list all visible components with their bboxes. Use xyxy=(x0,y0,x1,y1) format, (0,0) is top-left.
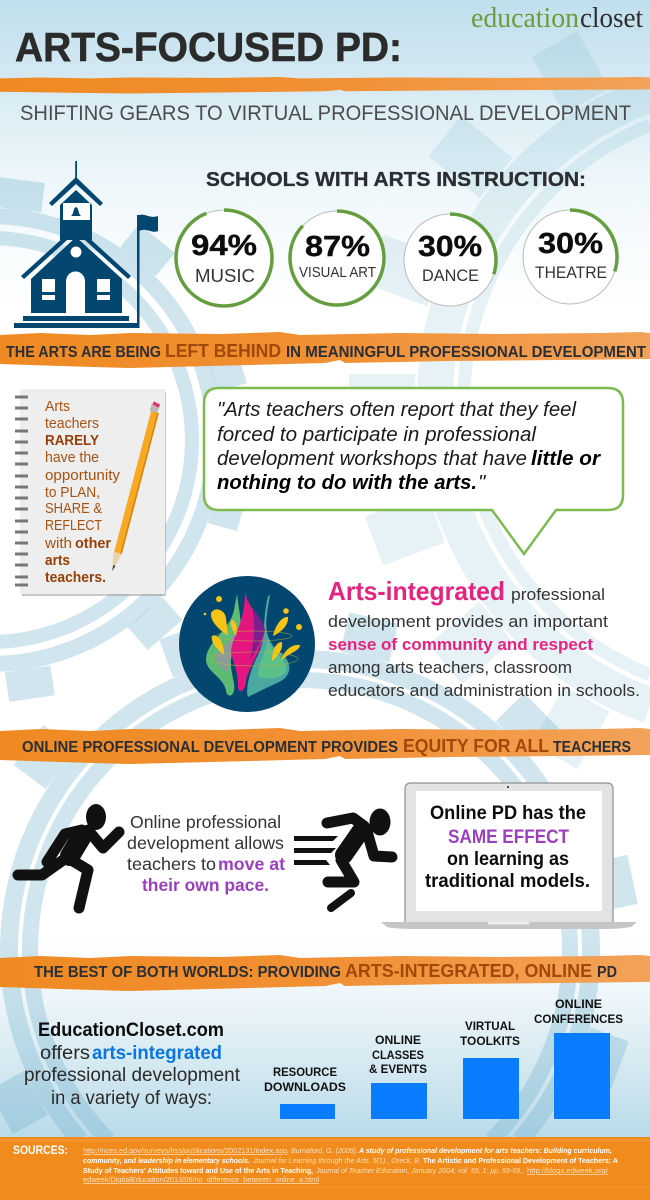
callout: quote bubble: " xyxy=(478,471,487,494)
bar: virtual toolkits: VIRTUAL xyxy=(465,1019,515,1033)
banner: equity for all: ONLINE PROFESSIONAL DEVELOPMENT PROVIDES xyxy=(22,739,398,756)
text block: educationcloset offer: EducationCloset.com xyxy=(38,1019,224,1041)
callout: quote bubble: "Arts teachers often report that they feel xyxy=(217,398,577,421)
logo: educationcloset: closet xyxy=(580,3,643,34)
source citations: http://nces.ed.gov/surveys/frss/publications/2002131/index.asp xyxy=(83,1146,287,1155)
donut: music 94%: MUSIC xyxy=(195,265,255,286)
text block: educationcloset offer: professional development xyxy=(24,1064,241,1086)
banner: left behind: THE ARTS ARE BEING xyxy=(6,344,161,361)
notebook text: RARELY xyxy=(45,433,99,449)
laptop screen text: traditional models. xyxy=(425,870,590,892)
text block: arts-integrated: professional xyxy=(511,585,605,604)
text block: arts-integrated: educators and administration in schools. xyxy=(328,681,640,700)
text block: move at own pace: their own pace. xyxy=(142,875,269,895)
text block: arts-integrated: Arts-integrated xyxy=(328,576,505,606)
callout: quote bubble: forced to participate in professional xyxy=(217,423,537,446)
banner: best of both worlds xyxy=(0,955,650,991)
banner: left behind: IN MEANINGFUL PROFESSIONAL DEVELOPMENT xyxy=(286,344,647,361)
laptop screen text: Online PD has the xyxy=(430,802,586,824)
text block: arts-integrated: sense of community and respect xyxy=(328,635,593,654)
notebook text: have the xyxy=(45,450,99,466)
notebook text xyxy=(44,399,121,586)
source citations: Journal for Learning through the Arts, 5(1)., Oreck, B. xyxy=(252,1156,421,1165)
notebook text: SHARE & xyxy=(45,501,102,517)
text block: educationcloset offer: in a variety of ways: xyxy=(51,1087,212,1109)
donut: theatre 30%: 30% xyxy=(538,228,603,260)
panel: sources xyxy=(0,1137,650,1200)
notebook text: with xyxy=(44,536,72,552)
banner: left behind xyxy=(0,332,650,368)
donut: dance 30%: DANCE xyxy=(422,266,479,285)
text block: educationcloset offer: arts-integrated xyxy=(92,1042,222,1064)
laptop screen text: on learning as xyxy=(447,848,569,870)
heading: schools with arts instruction: SCHOOLS WITH ARTS INSTRUCTION: xyxy=(206,169,586,191)
laptop xyxy=(381,783,637,929)
banner: equity for all: EQUITY FOR ALL xyxy=(403,735,549,756)
bar: online classes and events: CLASSES xyxy=(372,1048,424,1062)
donut: visual art 87%: VISUAL ART xyxy=(299,265,376,281)
source citations: The Artistic and Professional Development of Teachers: A xyxy=(423,1156,619,1165)
text block: arts-integrated: among arts teachers, classroom xyxy=(328,658,572,677)
icon: schoolhouse xyxy=(14,161,158,328)
banner: best of both worlds: ARTS-INTEGRATED, ONLINE xyxy=(345,960,592,981)
icon: sprinter with speed lines xyxy=(294,808,392,908)
bar: online classes and events: ONLINE xyxy=(375,1033,421,1047)
bar chart: ways of offering PD xyxy=(264,997,623,1119)
bar: resource downloads: DOWNLOADS xyxy=(264,1080,346,1094)
donut: dance 30% xyxy=(404,214,496,306)
bar: online conferences: CONFERENCES xyxy=(534,1012,623,1026)
banner: left behind: LEFT BEHIND xyxy=(165,340,281,361)
gear: lower centre xyxy=(1,618,633,1140)
notebook text: teachers. xyxy=(45,570,106,586)
bar: resource downloads: RESOURCE xyxy=(273,1065,337,1079)
text block: move at own pace: Online professional xyxy=(130,812,281,832)
donut: theatre 30% xyxy=(523,210,617,304)
notebook spiral binding xyxy=(15,397,28,585)
notebook text: to PLAN, xyxy=(45,485,100,501)
source citations: Journal of Teacher Education, January 2004; vol. 55, 1: pp. 55-69.; xyxy=(315,1166,524,1175)
bar: online classes and events xyxy=(369,1033,427,1119)
donut: music 94%: 94% xyxy=(191,230,257,262)
text block: educationcloset offer xyxy=(24,1019,241,1109)
banner: equity for all xyxy=(0,728,650,764)
notebook text: teachers xyxy=(45,416,99,432)
bar: online conferences: ONLINE xyxy=(555,997,602,1011)
banner: best of both worlds: PD xyxy=(597,964,617,981)
bar: resource downloads xyxy=(264,1065,346,1119)
banner: equity for all: TEACHERS xyxy=(553,739,631,756)
source citations: Study of Teachers' Attitudes toward and Use of the Arts in Teaching, xyxy=(83,1166,313,1175)
donut: visual art 87% xyxy=(290,211,384,305)
icon: pencil xyxy=(112,403,158,571)
text block: educationcloset offer: offers xyxy=(40,1042,90,1064)
gear: upper left xyxy=(0,180,243,699)
source citations: , Burnaford, G. (2009). xyxy=(287,1146,358,1155)
text block: move at own pace: development allows xyxy=(127,833,284,853)
bar: virtual toolkits xyxy=(460,1019,520,1119)
text block: move at own pace: teachers to xyxy=(127,854,216,874)
text block: arts-integrated: development provides an important xyxy=(328,612,608,631)
callout: quote bubble: development workshops that have xyxy=(217,447,527,470)
banner: best of both worlds: THE BEST OF BOTH WORLDS: PROVIDING xyxy=(34,964,341,981)
bar: virtual toolkits: TOOLKITS xyxy=(460,1034,520,1048)
source citations xyxy=(83,1146,619,1184)
text block: move at own pace: move at xyxy=(218,854,285,874)
notebook text: arts xyxy=(45,553,70,569)
panel: notebook xyxy=(15,389,166,596)
icon: abstract art circle xyxy=(179,576,315,712)
callout: quote bubble: nothing to do with the arts. xyxy=(217,471,477,494)
laptop screen text xyxy=(425,802,590,892)
sources label: SOURCES: xyxy=(13,1145,68,1157)
logo: educationcloset: education xyxy=(471,3,579,34)
bar: online conferences xyxy=(534,997,623,1119)
donut: theatre 30%: THEATRE xyxy=(535,264,607,282)
notebook text: REFLECT xyxy=(45,518,102,534)
text block: arts-integrated xyxy=(328,576,640,700)
callout: quote bubble: little or xyxy=(531,447,601,470)
icon: runner left xyxy=(18,804,119,908)
notebook text: other xyxy=(75,536,111,552)
title: ARTS-FOCUSED PD: xyxy=(15,24,402,70)
source citations: http://blogs.edweek.org/ xyxy=(527,1166,609,1175)
logo: educationcloset xyxy=(471,3,643,34)
notebook text: opportunity xyxy=(45,468,121,484)
bar: online classes and events: & EVENTS xyxy=(369,1062,427,1076)
donut: dance 30%: 30% xyxy=(418,231,482,263)
callout: quote bubble xyxy=(204,388,623,554)
donut: music 94% xyxy=(176,210,272,306)
source citations: community, and leadership in elementary schools. xyxy=(83,1156,250,1165)
laptop screen text: SAME EFFECT xyxy=(448,826,569,848)
source citations: edweek/DigitalEducation/2013/06/no_difference_between_online_a.html xyxy=(83,1175,319,1184)
notebook text: Arts xyxy=(45,399,70,415)
gear: upper right xyxy=(349,44,650,756)
source citations: A study of professional development for arts teachers: Building curriculum, xyxy=(358,1146,612,1155)
donut: visual art 87%: 87% xyxy=(305,231,370,263)
orange paint stroke: title rule xyxy=(0,77,650,94)
text block: move at own pace xyxy=(127,812,285,895)
